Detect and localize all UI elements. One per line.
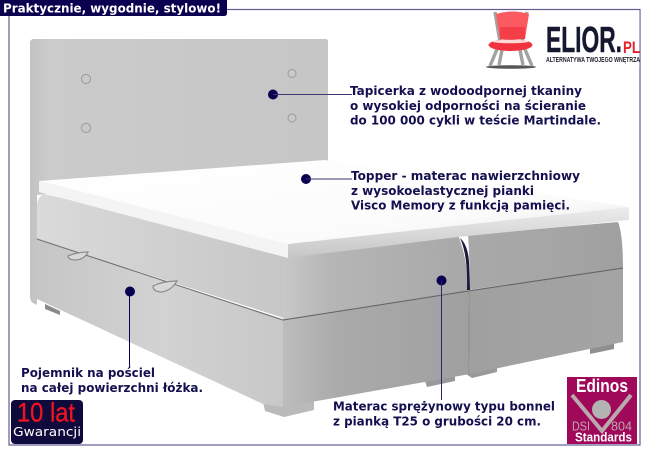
drawer handles	[68, 252, 177, 292]
badge: 10 year warranty: Gwarancji	[13, 424, 81, 439]
feet	[45, 304, 614, 417]
callout: topper: z wysokoelastycznej pianki	[351, 183, 534, 198]
callout: bonnel mattress	[333, 276, 555, 428]
storage drawer base	[37, 239, 623, 407]
callout: upholstery: o wysokiej odporności na ścieranie	[350, 98, 586, 113]
badge: 10 year warranty	[11, 398, 83, 444]
logo domain: PL	[623, 38, 640, 57]
icon: red chair	[486, 12, 536, 69]
callout: upholstery: do 100 000 cykli w teście Martindale.	[350, 112, 601, 128]
logo: Elior.pl	[486, 10, 640, 69]
badge: Edinos DSI 804 standards: DSI	[572, 418, 590, 434]
bed illustration	[30, 39, 629, 417]
mattress	[37, 194, 623, 320]
callout: storage container: na całej powierzchni łóżka.	[21, 380, 203, 395]
callout: upholstery	[268, 83, 601, 128]
headboard buttons	[81, 70, 296, 133]
badge: 10 year warranty: 10 lat	[17, 398, 75, 428]
callout: topper: Topper - materac nawierzchniowy	[351, 168, 580, 183]
title banner: Praktycznie, wygodnie, stylowo!	[3, 0, 221, 16]
badge: Edinos DSI 804 standards: Standards	[575, 430, 632, 444]
badge: Edinos DSI 804 standards: 804	[611, 418, 632, 434]
badge: Edinos DSI 804 standards: Edinos	[576, 376, 628, 396]
badge: Edinos DSI 804 standards	[567, 376, 637, 444]
headboard	[30, 39, 328, 305]
callout: storage container	[21, 286, 203, 395]
callout: topper: Visco Memory z funkcją pamięci.	[351, 198, 570, 212]
callout: bonnel mattress: z pianką T25 o grubości 20 cm.	[333, 414, 541, 428]
callout: storage container: Pojemnik na pościel	[21, 365, 155, 380]
topper	[39, 160, 629, 258]
callout: bonnel mattress: Materac sprężynowy typu bonnel	[333, 398, 555, 414]
callout: topper	[301, 168, 580, 212]
callout: upholstery: Tapicerka z wodoodpornej tkaniny	[350, 83, 582, 98]
